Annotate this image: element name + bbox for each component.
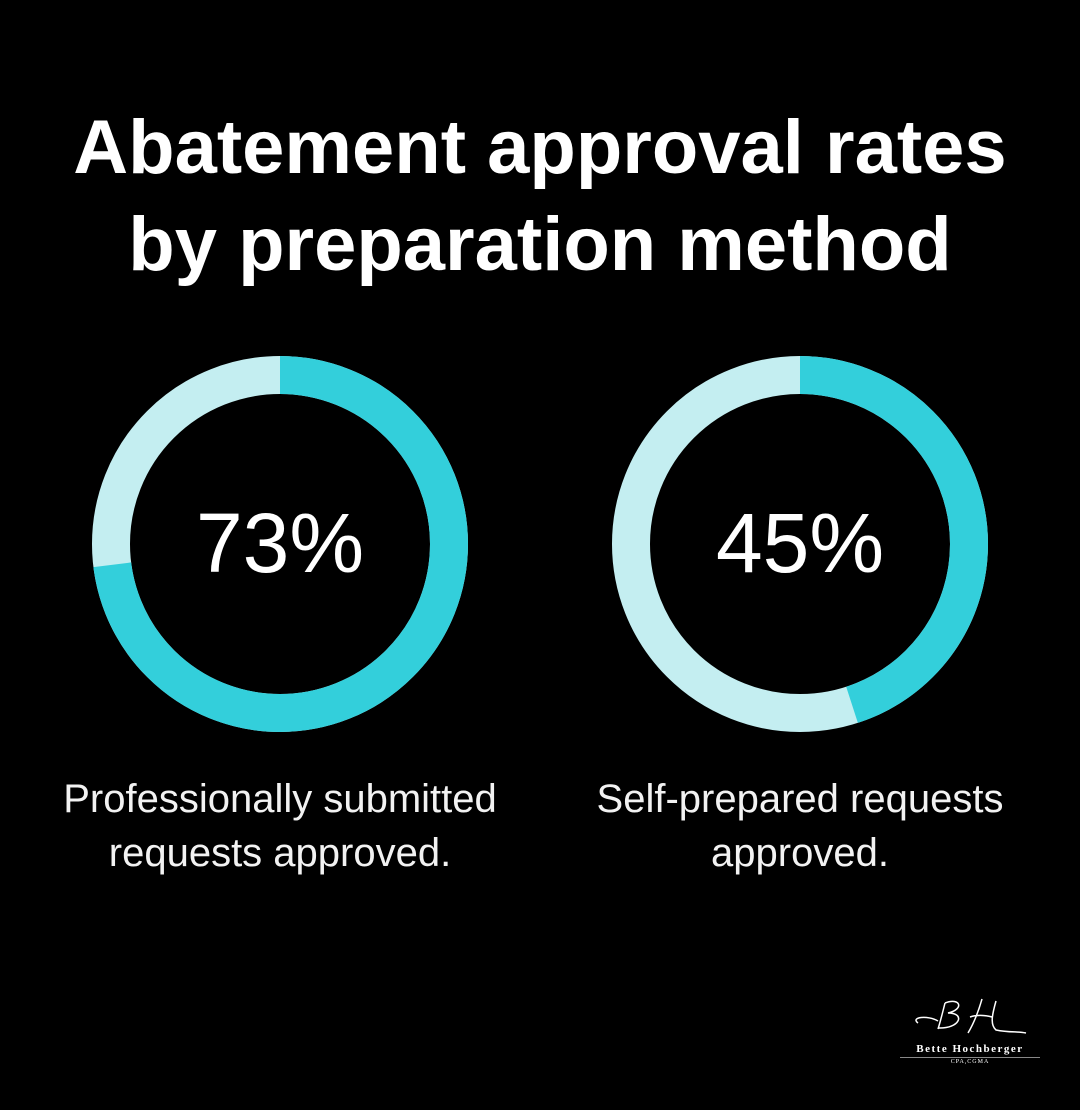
- label: self-prepared: approved.: [711, 831, 889, 875]
- label: professional: requests approved.: [109, 831, 451, 875]
- donut chart: self-prepared 45%: [612, 356, 988, 732]
- label: professional: Professionally submitted: [63, 777, 497, 821]
- label: professional: [63, 777, 497, 875]
- donut chart: professional 73%: 73%: [196, 496, 364, 590]
- logo: Bette Hochberger: [916, 1043, 1024, 1055]
- donut chart: professional 73%: [92, 356, 468, 732]
- label: self-prepared: [597, 777, 1003, 875]
- logo: [900, 998, 1040, 1065]
- title: Abatement approval rates: [73, 105, 1007, 190]
- title: [73, 105, 1007, 287]
- donut chart: self-prepared 45%: 45%: [716, 496, 884, 590]
- logo: CPA,CGMA: [951, 1059, 989, 1065]
- title: by preparation method: [128, 202, 952, 287]
- label: self-prepared: Self-prepared requests: [597, 777, 1003, 821]
